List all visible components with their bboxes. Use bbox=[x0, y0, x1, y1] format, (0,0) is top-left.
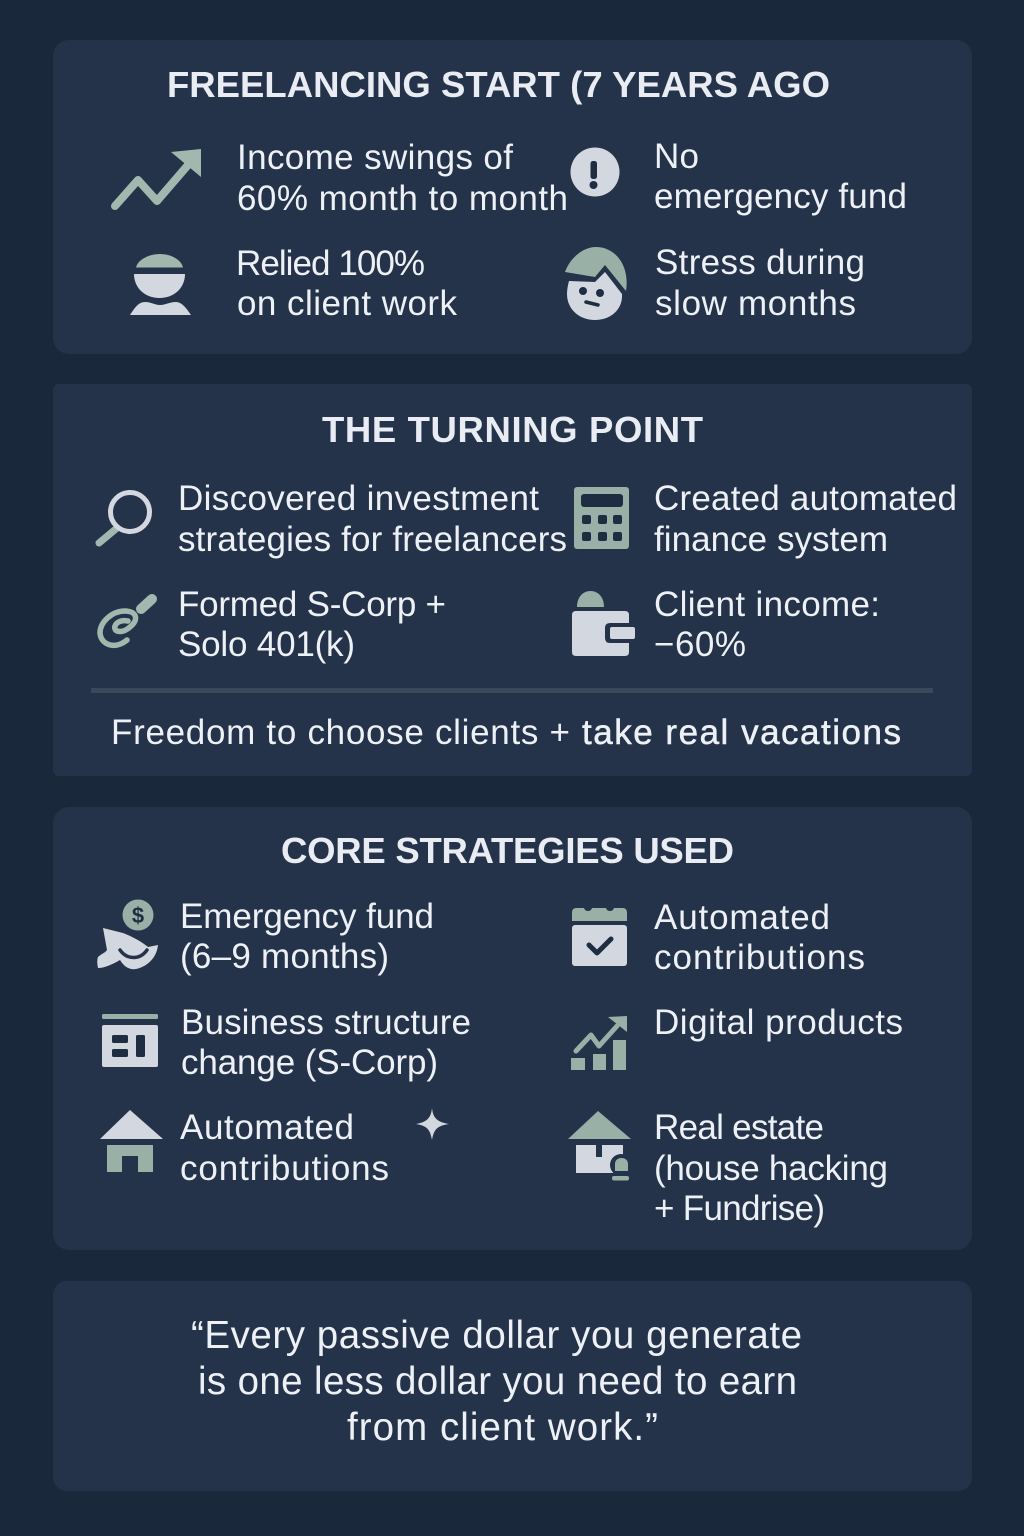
panel: turning point bbox=[53, 384, 972, 776]
text: client income: −60% bbox=[654, 625, 746, 664]
text: emergency fund months: (6–9 months) bbox=[180, 937, 389, 976]
text: stress during slow months: Stress during bbox=[655, 243, 865, 282]
text: business structure: Business structure bbox=[181, 1003, 471, 1042]
text: relied on client work: on client work bbox=[237, 284, 458, 323]
text: discovered investment strategies: strategies for freelancers bbox=[178, 520, 567, 559]
text: income swings: Income swings of bbox=[237, 138, 513, 177]
text: s-corp and solo 401k bbox=[178, 585, 446, 664]
text: automated finance system: finance system bbox=[654, 520, 888, 559]
text: automated contributions left: contributions bbox=[180, 1149, 389, 1188]
text: digital products: Digital products bbox=[654, 1003, 903, 1042]
text: client income: Client income: bbox=[654, 585, 880, 624]
text: stress during slow months: slow months bbox=[655, 284, 856, 323]
icon: building layout bbox=[102, 1014, 158, 1067]
text: client income bbox=[654, 585, 880, 664]
text: business structure bbox=[181, 1003, 471, 1082]
panel: freelancing start bbox=[53, 40, 972, 354]
text: emergency fund months bbox=[180, 897, 434, 976]
icon: calendar check bbox=[572, 908, 627, 966]
text: quote: “Every passive dollar you generate bbox=[191, 1314, 802, 1357]
icon: calculator bbox=[574, 487, 629, 549]
text: real estate bbox=[654, 1108, 888, 1228]
text: automated contributions right bbox=[654, 898, 865, 977]
icon: rising arrow bbox=[115, 149, 201, 206]
text: s-corp and solo 401k: Formed S-Corp + bbox=[178, 585, 446, 624]
text: income swings bbox=[237, 138, 568, 218]
text: discovered investment strategies: Discovered investment bbox=[178, 479, 539, 518]
icon: chain link bbox=[100, 599, 152, 645]
text: real estate: Real estate bbox=[654, 1108, 824, 1147]
icon: exclamation bbox=[570, 148, 620, 196]
heading: freelancing start: FREELANCING START (7 YEARS AGO bbox=[167, 64, 830, 105]
heading: turning point: THE TURNING POINT bbox=[322, 409, 703, 450]
text: automated contributions left bbox=[180, 1108, 389, 1188]
heading: core strategies: CORE STRATEGIES USED bbox=[281, 830, 734, 871]
text: quote bbox=[191, 1314, 802, 1449]
icon: wallet bbox=[572, 591, 635, 656]
text: business structure: change (S-Corp) bbox=[181, 1043, 438, 1082]
text: automated finance system bbox=[654, 479, 957, 559]
icon: growth chart bbox=[571, 1016, 627, 1070]
text: freedom callout: take real vacations bbox=[582, 713, 901, 752]
icon: hand with coin: $ bbox=[132, 903, 144, 928]
icon: house with lock bbox=[568, 1111, 632, 1180]
icon: house bbox=[100, 1110, 163, 1172]
text: automated finance system: Created automated bbox=[654, 479, 957, 518]
text: no emergency fund bbox=[654, 137, 907, 216]
text: relied on client work: Relied 100% bbox=[236, 244, 425, 283]
text: quote: is one less dollar you need to earn bbox=[198, 1360, 797, 1403]
panel: core strategies bbox=[53, 807, 972, 1250]
text: discovered investment strategies bbox=[178, 479, 567, 559]
text: real estate: (house hacking bbox=[654, 1149, 888, 1188]
text: no emergency fund: emergency fund bbox=[654, 177, 907, 216]
text: automated contributions right: contributions bbox=[654, 938, 865, 977]
icon: sparkle bbox=[416, 1108, 449, 1140]
icon: magnifier bbox=[99, 492, 150, 543]
text: freedom callout bbox=[111, 713, 901, 752]
text: income swings: 60% month to month bbox=[237, 179, 568, 218]
icon: stressed face bbox=[565, 247, 627, 320]
icon: person bbox=[130, 254, 191, 315]
text: automated contributions right: Automated bbox=[654, 898, 830, 937]
text: stress during slow months bbox=[655, 243, 865, 323]
text: freedom callout: Freedom to choose clients + bbox=[111, 713, 570, 752]
text: quote: from client work.” bbox=[347, 1406, 658, 1449]
text: s-corp and solo 401k: Solo 401(k) bbox=[178, 625, 355, 664]
text: real estate: + Fundrise) bbox=[654, 1189, 825, 1228]
text: emergency fund months: Emergency fund bbox=[180, 897, 434, 936]
panel: quote bbox=[53, 1281, 972, 1491]
icon: hand with coin bbox=[97, 900, 158, 969]
text: no emergency fund: No bbox=[654, 137, 699, 176]
text: automated contributions left: Automated bbox=[180, 1108, 354, 1147]
text: relied on client work bbox=[236, 244, 458, 323]
